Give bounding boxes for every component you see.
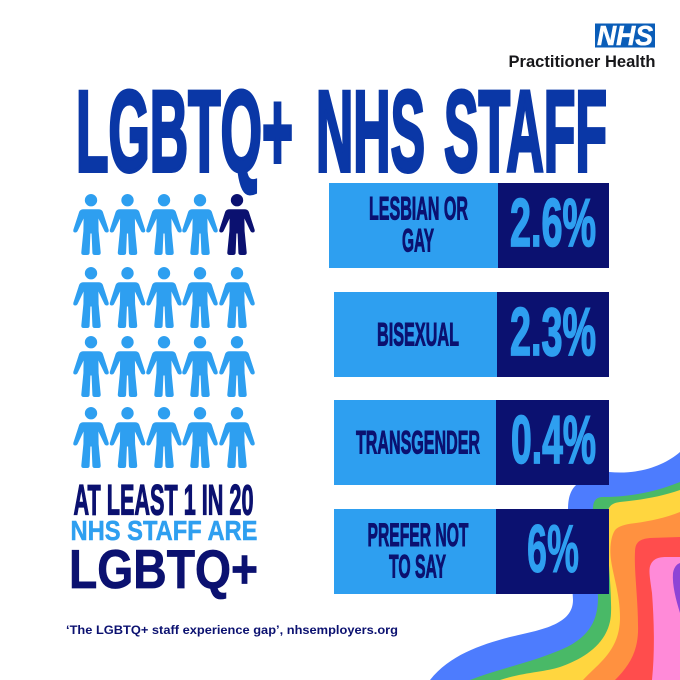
row 3 of people bbox=[73, 336, 255, 397]
callout line 2: NHS STAFF ARE bbox=[70, 515, 258, 546]
callout line 3: LGBTQ+ bbox=[69, 538, 258, 600]
stat: lesbian or gay bbox=[329, 183, 609, 268]
row 2 of people bbox=[73, 267, 255, 328]
highlighted person bbox=[219, 194, 255, 255]
stat: transgender: TRANSGENDER bbox=[356, 424, 480, 460]
stat: bisexual: BISEXUAL bbox=[377, 316, 459, 352]
stat: lesbian or gay: GAY bbox=[402, 222, 434, 258]
logo: NHS Practitioner Health bbox=[508, 20, 656, 71]
stat: bisexual bbox=[334, 292, 609, 377]
NHS badge: NHS bbox=[597, 20, 653, 51]
stat: prefer not to say: 6% bbox=[527, 511, 579, 587]
stat: bisexual: 2.3% bbox=[510, 294, 596, 370]
stat: lesbian or gay: 2.6% bbox=[510, 185, 596, 261]
callout line 1: AT LEAST 1 IN 20 bbox=[74, 478, 254, 524]
stat: prefer not to say: TO SAY bbox=[389, 548, 446, 584]
row 4 of people bbox=[73, 407, 255, 468]
callout: at least 1 in 20 bbox=[69, 478, 258, 600]
background rainbow wave bbox=[430, 452, 680, 680]
stat: transgender bbox=[334, 400, 609, 485]
title: NHS bbox=[316, 68, 425, 196]
pictogram: 1 in 20 people bbox=[73, 194, 255, 468]
row 1 of people bbox=[73, 194, 255, 255]
stat: lesbian or gay: LESBIAN OR bbox=[369, 190, 468, 226]
title: LGBTQ+ bbox=[76, 68, 293, 196]
stat: prefer not to say: PREFER NOT bbox=[368, 517, 469, 553]
logo wordmark: Practitioner Health bbox=[508, 53, 656, 71]
stat: prefer not to say bbox=[334, 509, 609, 594]
source citation: ‘The LGBTQ+ staff experience gap’, nhsemployers.org bbox=[66, 623, 398, 637]
stat: transgender: 0.4% bbox=[511, 402, 596, 478]
